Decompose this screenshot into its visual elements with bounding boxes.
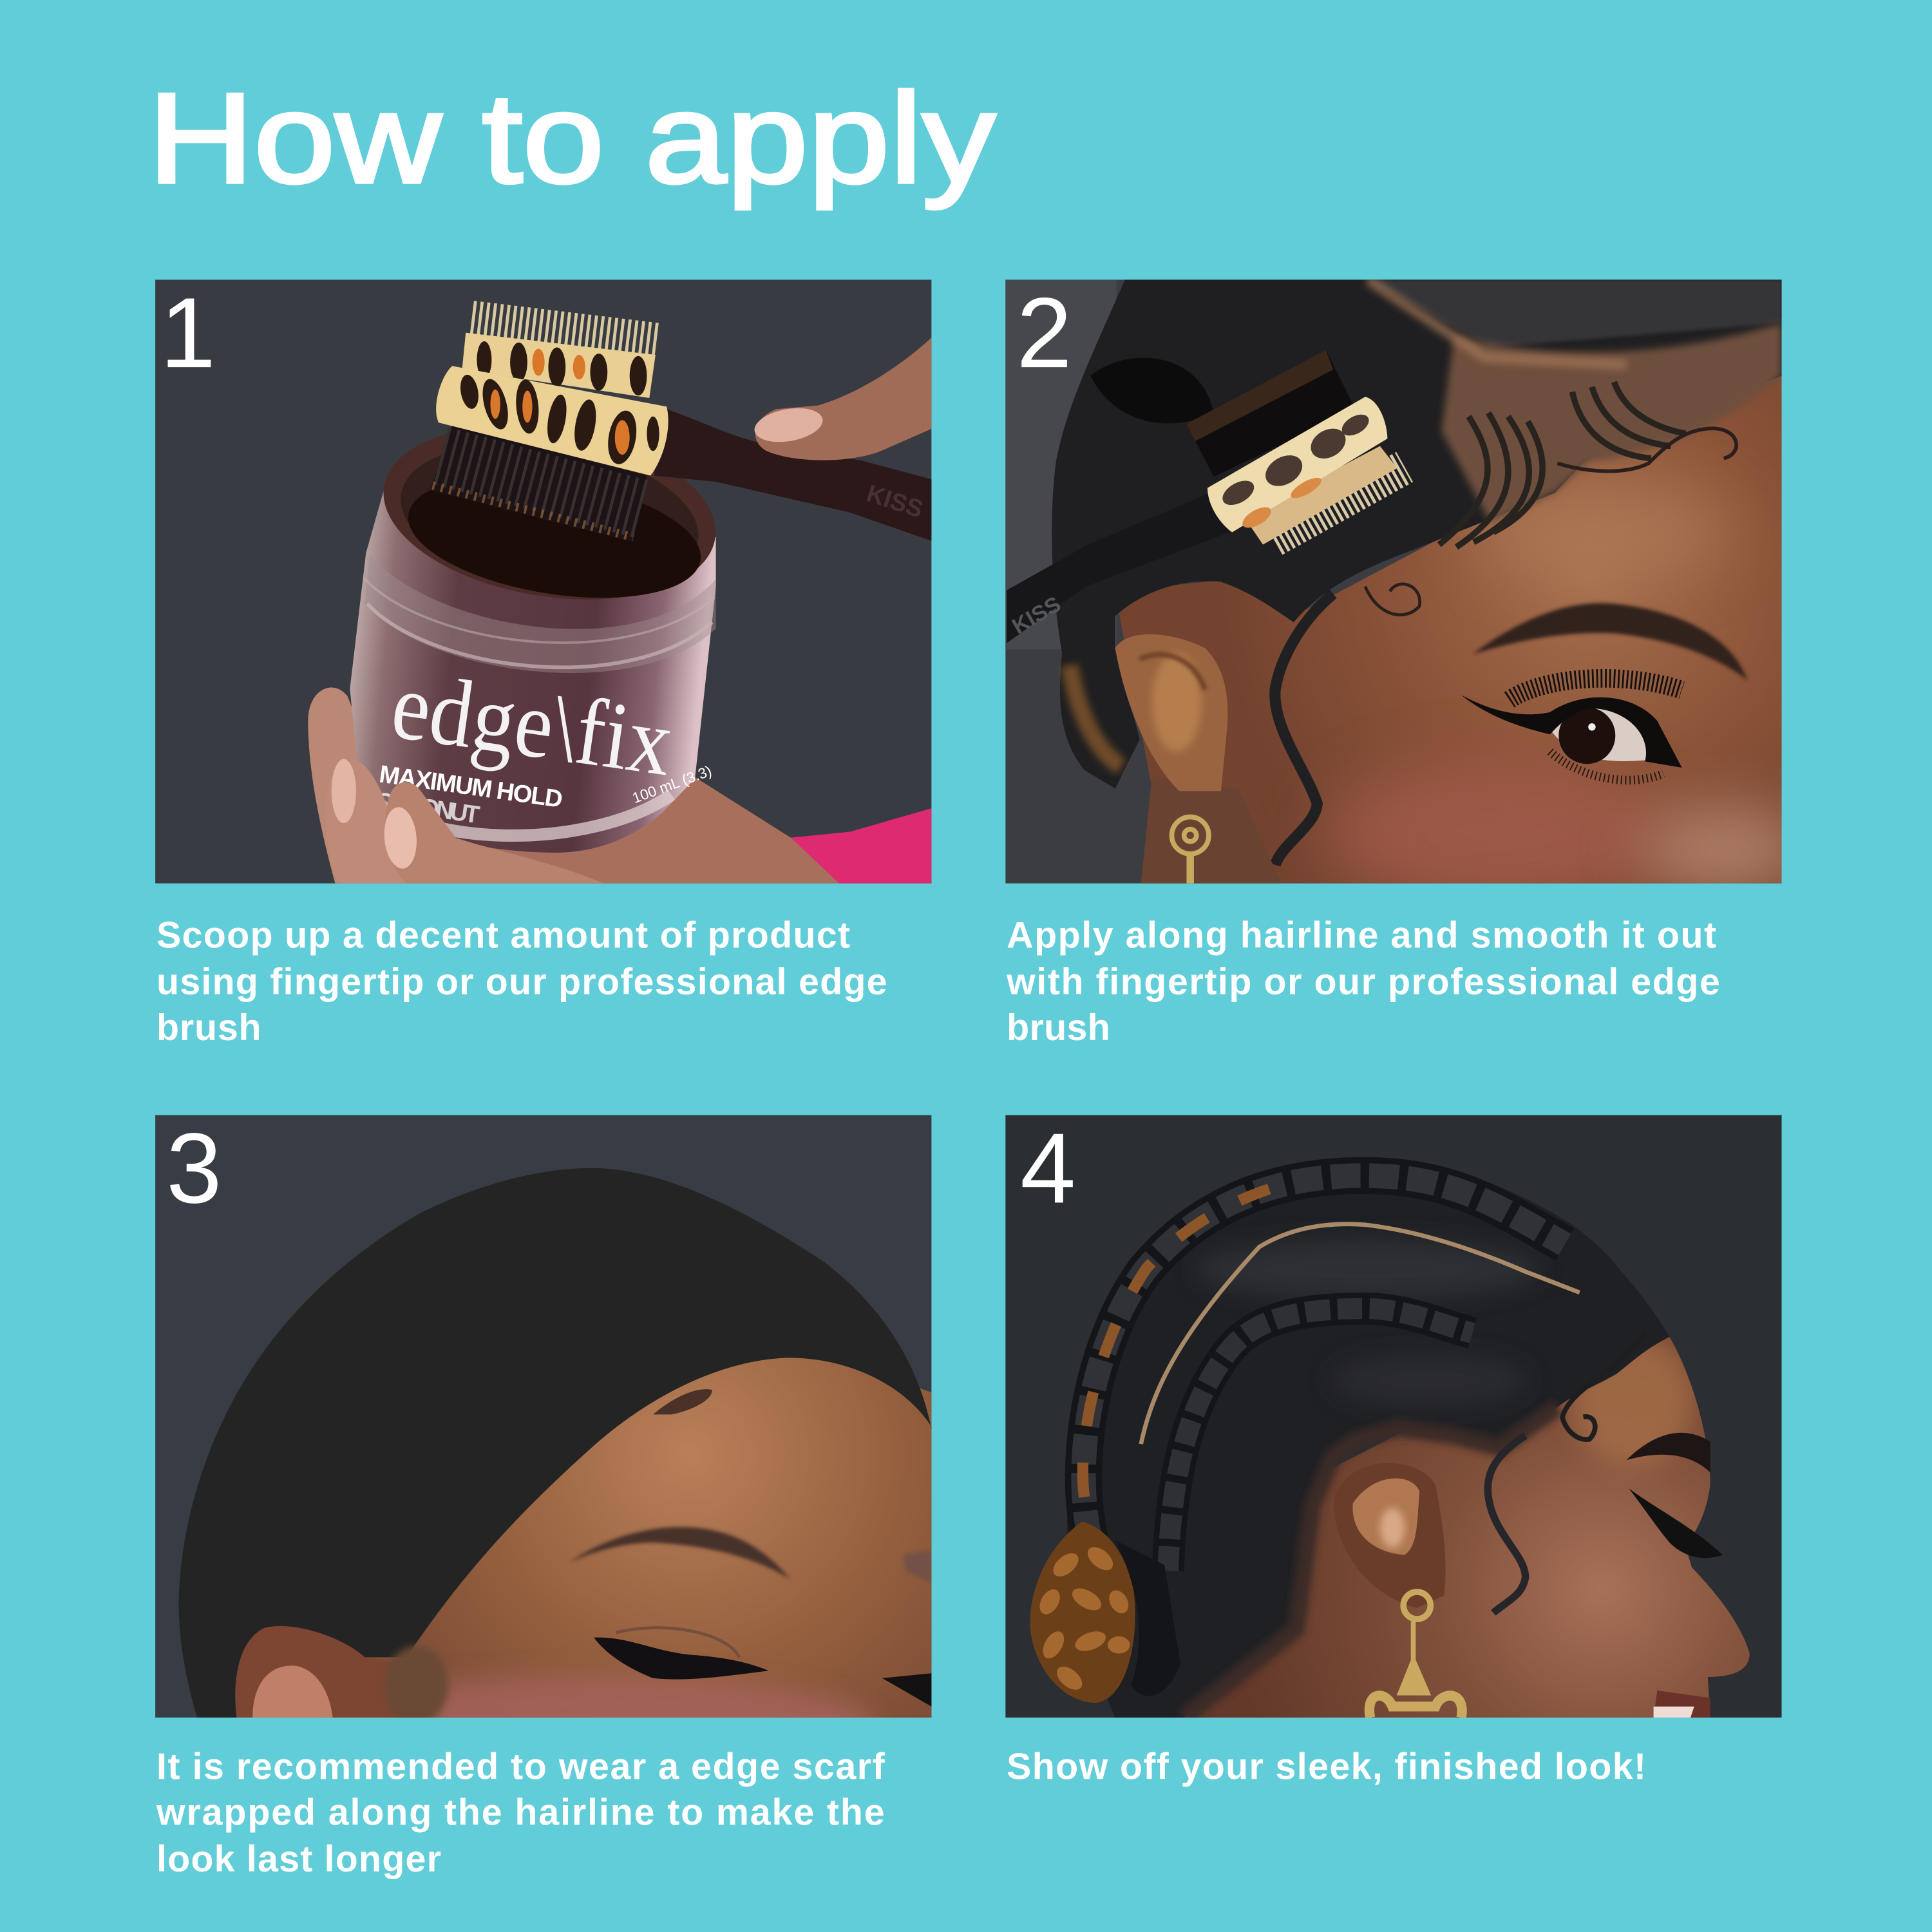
forehead curl	[653, 1389, 712, 1414]
ear	[1115, 634, 1227, 791]
brush leopard band	[1208, 397, 1387, 533]
temple curl	[1557, 428, 1736, 471]
panel: step 2 photo, applying along hairline	[1005, 277, 1811, 912]
step number 1: 1	[160, 277, 216, 388]
step 2 caption: brush	[1007, 1007, 1110, 1048]
earring	[1172, 817, 1209, 884]
forehead highlight	[1466, 480, 1738, 579]
right eyebrow hint	[903, 1550, 931, 1584]
finger on handle	[752, 337, 931, 460]
closed eye	[594, 1638, 769, 1680]
brush handle	[1007, 494, 1229, 643]
ear	[235, 1626, 413, 1718]
eye	[1461, 678, 1682, 780]
brush handle: KISS	[1008, 592, 1065, 639]
step number 4: 4	[1020, 1112, 1075, 1224]
hair mass	[1052, 279, 1782, 865]
jar label: MAXIMUM HOLD	[377, 761, 564, 813]
hair mass	[1066, 1160, 1669, 1718]
jar label: edge\fix	[386, 652, 679, 796]
brush comb	[1244, 446, 1405, 545]
pink sleeve	[788, 808, 931, 884]
ear	[1334, 1463, 1446, 1608]
right eye	[882, 1673, 931, 1707]
brush comb	[462, 318, 657, 398]
face skin	[1115, 357, 1782, 884]
forehead curl	[1365, 584, 1420, 615]
jar	[350, 404, 728, 854]
face skin	[308, 1343, 931, 1718]
step 2 caption: Apply along hairline and smooth it out	[1007, 914, 1716, 956]
sideburn wave	[1275, 594, 1333, 865]
step 2 caption	[1006, 914, 1720, 1048]
title: How to apply	[148, 67, 996, 210]
step 4 caption: Show off your sleek, finished look!	[1007, 1747, 1646, 1788]
step 1 caption	[156, 914, 887, 1048]
lips	[1654, 1690, 1710, 1718]
parting line	[1141, 1224, 1580, 1444]
baby hair curl	[1562, 1331, 1645, 1439]
jar: 100 mL (3.3)	[630, 762, 714, 806]
jar label	[380, 679, 670, 823]
brush leopard band	[436, 366, 668, 476]
step number 3: 3	[166, 1112, 222, 1224]
brush bristles	[430, 425, 647, 542]
step 3 caption: It is recommended to wear a edge scarf	[156, 1747, 886, 1788]
step 3 caption: wrapped along the hairline to make the	[156, 1792, 885, 1833]
panel: step 4 photo, finished look	[1005, 1112, 1782, 1718]
inner braid	[1168, 1309, 1472, 1571]
cheek blush	[308, 1676, 875, 1774]
forehead warm tone	[1571, 1331, 1694, 1466]
step 3 caption: look last longer	[156, 1839, 441, 1880]
face skin	[1184, 1337, 1750, 1718]
step 1 caption: Scoop up a decent amount of product	[156, 914, 850, 956]
outer braid	[1083, 1175, 1565, 1540]
step 1 caption: using fingertip or our professional edge	[156, 961, 887, 1003]
brush handle	[654, 408, 931, 541]
eyelid	[616, 1628, 739, 1657]
brush handle: KISS	[863, 479, 927, 524]
fingers over jar	[326, 759, 604, 884]
eyebrow	[1627, 1433, 1710, 1472]
eyebrow	[1472, 603, 1747, 680]
step number 2: 2	[1016, 277, 1072, 388]
step 3 caption	[156, 1747, 886, 1880]
hand holding jar	[308, 688, 839, 884]
neck	[1141, 776, 1282, 884]
closed eye with lashes	[1629, 1488, 1723, 1558]
panel: step 1 photo, scooping product	[155, 277, 931, 884]
temple hair wave	[1488, 1435, 1526, 1613]
bun	[1030, 1522, 1180, 1703]
jar label: COCONUT	[374, 787, 481, 829]
eyebrow	[569, 1527, 791, 1580]
scarf	[178, 1168, 931, 1718]
step 1 caption: brush	[156, 1007, 261, 1048]
brush bristles	[1186, 350, 1356, 477]
step 2 caption: with fingertip or our professional edge	[1006, 961, 1720, 1003]
cheek blush	[1318, 764, 1663, 912]
earring	[1369, 1592, 1462, 1718]
temple hair	[384, 1646, 448, 1725]
panel: step 3 photo, edge scarf	[155, 1112, 931, 1774]
cheek highlight	[1639, 807, 1811, 893]
